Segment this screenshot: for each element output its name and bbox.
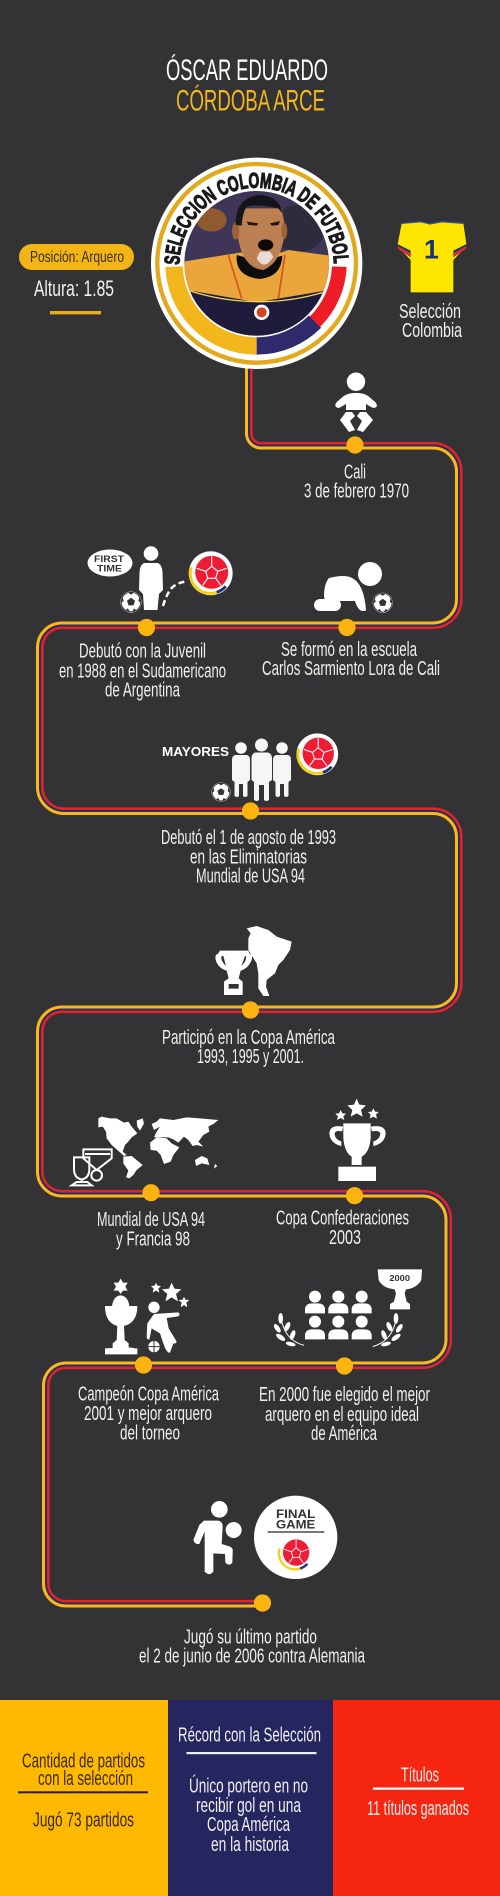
- text: senior debut: en las Eliminatorias: [190, 846, 307, 868]
- panel: matches: Cantidad de partidos: [22, 1751, 145, 1773]
- text: confederations: [276, 1207, 409, 1249]
- panel: record: Copa América: [207, 1814, 291, 1836]
- text: ideal team: arquero en el equipo ideal: [265, 1404, 419, 1426]
- text: school: Se formó en la escuela: [281, 639, 418, 661]
- icon: final game badge: [254, 1496, 337, 1579]
- text: juvenile debut: en 1988 en el Sudamericano: [59, 661, 226, 683]
- text: ideal team: [259, 1384, 430, 1445]
- panel: titles: Títulos: [401, 1765, 439, 1787]
- text: world cups: [97, 1209, 205, 1251]
- icon: confederations trophy: [329, 1099, 386, 1181]
- height text: Altura: 1.85: [34, 276, 114, 301]
- icon: baby: [335, 372, 377, 432]
- text: juvenile debut: Debutó con la Juvenil: [79, 641, 206, 663]
- panel: record: Único portero en no: [189, 1775, 308, 1798]
- text: 2001 champion: del torneo: [120, 1422, 180, 1444]
- text: birth: Cali: [344, 461, 366, 483]
- icon: final game badge: FINAL: [276, 1507, 315, 1521]
- text: Copa America: 1993, 1995 y 2001.: [197, 1046, 304, 1068]
- shirt label: Selección: [399, 301, 461, 323]
- title: ÓSCAR EDUARDO: [166, 54, 328, 87]
- text: 2001 champion: [78, 1384, 220, 1444]
- title: [166, 54, 328, 118]
- text: confederations: Copa Confederaciones: [276, 1207, 409, 1229]
- timeline dots: [135, 436, 364, 1612]
- text: juvenile debut: de Argentina: [105, 680, 181, 702]
- icon: mayores team: [162, 733, 338, 802]
- icon: audience with laurel and trophy: 2000: [389, 1274, 411, 1283]
- panel: record: recibir gol en una: [196, 1795, 302, 1817]
- shirt label: Colombia: [402, 320, 463, 342]
- text: 2001 champion: Campeón Copa América: [78, 1384, 220, 1406]
- position pill: Posición: Arquero: [30, 249, 124, 266]
- icon: first time debut: FIRST: [94, 554, 125, 564]
- panel: record: [168, 1700, 333, 1896]
- text: birth: [304, 461, 409, 503]
- text: senior debut: Mundial de USA 94: [196, 866, 305, 888]
- text: senior debut: Debutó el 1 de agosto de 1993: [161, 827, 336, 849]
- icon: cup and player with stars: [105, 1279, 189, 1354]
- icon: crawling baby: [314, 562, 382, 611]
- text: world cups: Mundial de USA 94: [97, 1209, 205, 1231]
- panel: record: Récord con la Selección: [178, 1725, 321, 1747]
- underline: [50, 311, 101, 314]
- icon: first time debut: TIME: [97, 564, 122, 574]
- badge with portrait: [151, 158, 362, 369]
- icon: first time debut: [88, 546, 233, 612]
- text: juvenile debut: [59, 641, 226, 702]
- timeline path: [38, 365, 461, 1606]
- panel: matches: Jugó 73 partidos: [33, 1810, 134, 1832]
- icon: player juggling: [193, 1501, 242, 1574]
- position pill: [19, 244, 134, 270]
- shirt number: 1: [424, 234, 439, 264]
- text: 2001 champion: 2001 y mejor arquero: [84, 1403, 212, 1425]
- portrait: [182, 188, 332, 342]
- icon: mayores team: MAYORES: [162, 744, 229, 759]
- text: Copa America: [162, 1027, 336, 1068]
- text: senior debut: [161, 827, 336, 888]
- text: school: [262, 639, 440, 680]
- text: last game: Jugó su último partido: [184, 1626, 317, 1648]
- text: world cups: y Francia 98: [116, 1229, 190, 1251]
- icon: audience with laurel and trophy: [273, 1269, 422, 1347]
- text: birth: 3 de febrero 1970: [304, 481, 409, 503]
- title: CÓRDOBA ARCE: [176, 85, 325, 118]
- text: last game: [139, 1626, 366, 1668]
- shirt icon: [397, 222, 467, 292]
- text: Copa America: Participó en la Copa América: [162, 1027, 336, 1049]
- badge lettering: SELECCION COLOMBIA DE FUTBOL: [164, 172, 349, 265]
- shirt label: [399, 301, 463, 342]
- icon: final game badge: GAME: [276, 1518, 315, 1532]
- panel: record: en la historia: [211, 1834, 290, 1856]
- icon: ball: [373, 593, 393, 613]
- text: last game: el 2 de junio de 2006 contra Alemania: [139, 1646, 366, 1668]
- panel: titles: [333, 1700, 500, 1896]
- panel: matches: con la selección: [38, 1768, 133, 1790]
- text: ideal team: de América: [311, 1423, 378, 1445]
- text: confederations: 2003: [329, 1227, 361, 1249]
- icon: trophy and South America: [215, 926, 292, 996]
- panel: matches: [0, 1700, 168, 1896]
- icon: world map and medal: [72, 1117, 218, 1185]
